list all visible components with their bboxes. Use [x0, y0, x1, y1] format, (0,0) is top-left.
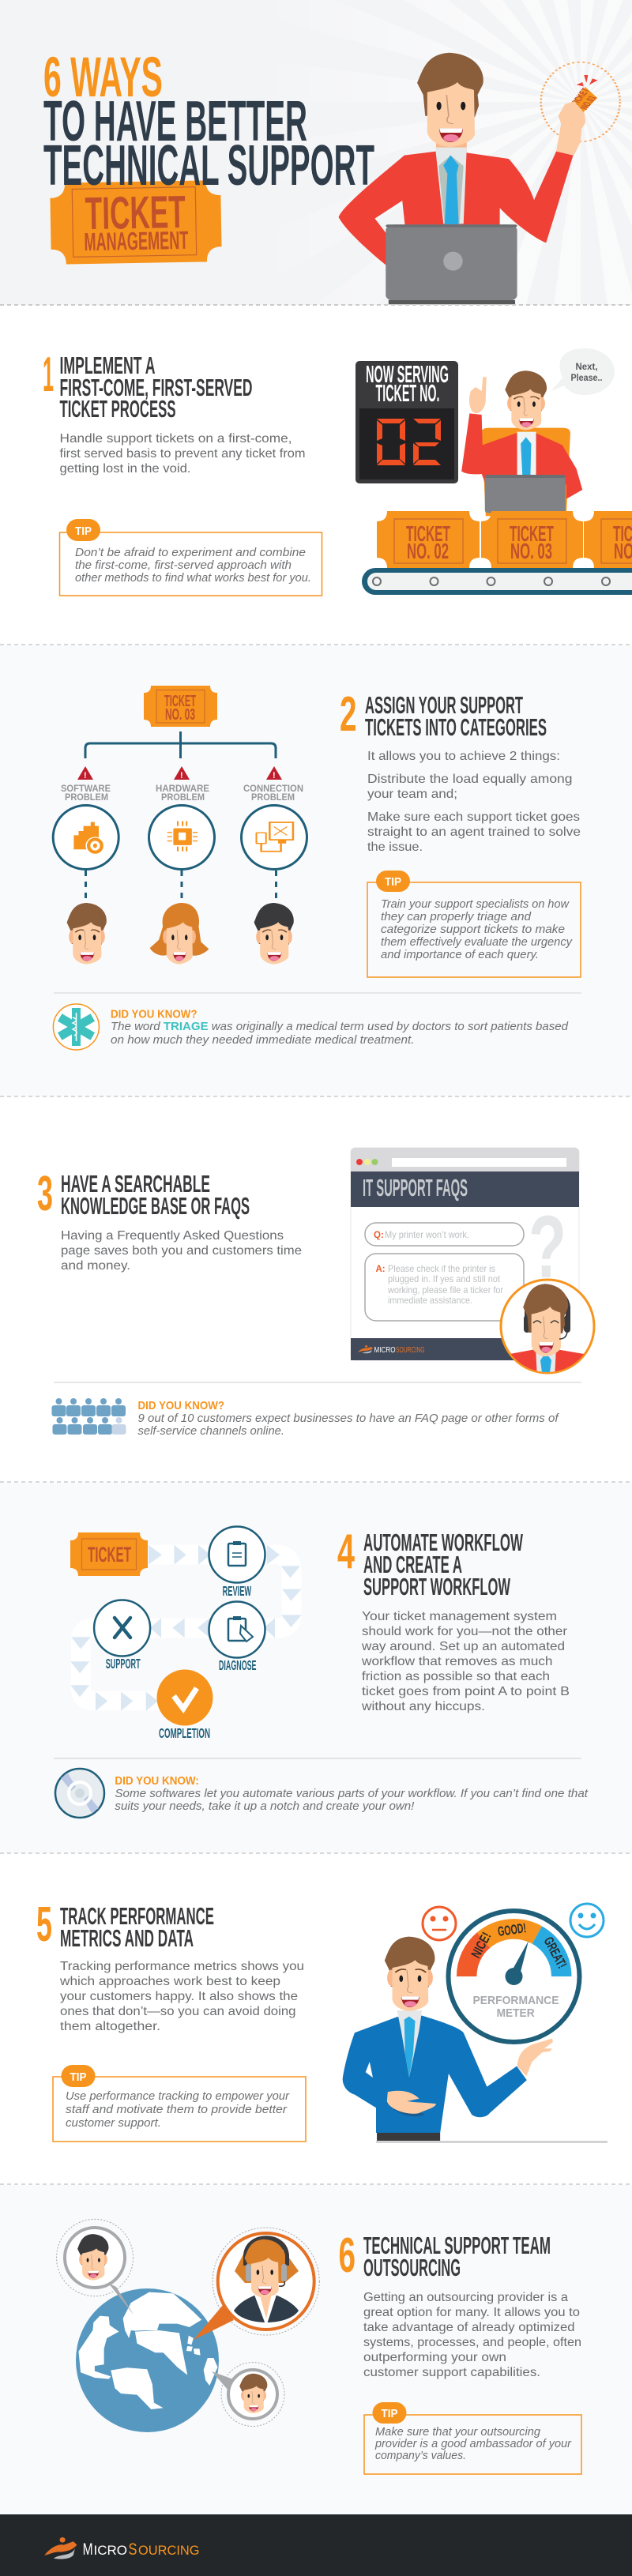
conveyor of tickets: NO. 02	[407, 539, 449, 563]
section 5 heading: TRACK PERFORMANCE	[60, 1903, 214, 1930]
section 4 heading: 4	[337, 1525, 355, 1579]
tip box 2	[367, 871, 581, 977]
section 1 heading: IMPLEMENT A	[60, 352, 155, 379]
browser window: IT support FAQs: IT SUPPORT FAQS	[363, 1175, 468, 1202]
tip box 2: them effectively evaluate the urgency	[381, 936, 573, 949]
tip box 1: Don’t be afraid to experiment and combine	[75, 547, 306, 559]
step: ticket	[70, 1532, 148, 1576]
speech bubble: Please..	[570, 372, 602, 383]
conveyor of tickets: NO. 03	[510, 539, 552, 563]
section 2 heading	[340, 687, 547, 742]
tip box 1: other methods to find what works best for you.	[75, 572, 311, 585]
illustration: man with laptop holding ticket	[339, 53, 620, 304]
did you know: triage: The word TRIAGE was originally a medical term used by doctors to sort patients based	[111, 1021, 569, 1033]
tip box 5	[53, 2065, 306, 2142]
section 3 heading	[37, 1167, 250, 1221]
section 6 heading: OUTSOURCING	[363, 2254, 461, 2281]
category: software problem: !	[84, 771, 87, 780]
icon: happy face	[570, 1904, 604, 1937]
section 3 heading: KNOWLEDGE BASE OR FAQS	[61, 1193, 250, 1220]
browser window: IT support FAQs: immediate assistance.	[388, 1295, 472, 1306]
footer: M	[83, 2540, 93, 2559]
section 1 heading: TICKET PROCESS	[60, 396, 175, 423]
section 6 heading	[338, 2228, 551, 2283]
conveyor of tickets: TICKET	[510, 521, 554, 546]
tip box 1	[60, 519, 322, 596]
ticket no. 03 tree: NO. 03	[165, 706, 195, 724]
section 5 body text: ones that don’t—so you can avoid doing	[60, 2005, 295, 2018]
section 1 body text: first served basis to prevent any ticket from	[60, 447, 306, 461]
illustration: man with laptop holding ticket: TICKET	[569, 87, 592, 107]
footer	[0, 2514, 632, 2576]
section 5 body text	[59, 1960, 304, 2033]
section 5 body text: your customers happy. It also shows the	[60, 1990, 298, 2003]
step: ticket: TICKET	[88, 1543, 131, 1566]
man in blue suit	[343, 1937, 608, 2143]
section 6 body text: outperforming your own	[363, 2351, 506, 2364]
tip box 2: and importance of each query.	[381, 949, 539, 961]
section 5 body text: which approaches work best to keep	[59, 1975, 280, 1988]
digits: 02	[377, 419, 441, 465]
section 2 body text: Distribute the load equally among	[367, 773, 572, 786]
section 4 body text: workflow that removes as much	[361, 1655, 553, 1668]
browser window: IT support FAQs: Q:	[374, 1231, 384, 1240]
section 6 body text: great option for many. It allows you to	[363, 2306, 580, 2319]
tip box 6: provider is a good ambassador of your	[374, 2438, 572, 2450]
did you know: faq: self-service channels online.	[137, 1425, 284, 1438]
tip box 6: TIP	[381, 2407, 398, 2420]
footer: OURCING	[138, 2543, 199, 2558]
section 1 body text: Handle support tickets on a first-come,	[60, 432, 292, 446]
step: review	[209, 1526, 265, 1599]
section 4 body text: friction as possible so that each	[362, 1670, 550, 1683]
section 3 heading: HAVE A SEARCHABLE	[61, 1171, 210, 1198]
performance meter: METER	[497, 2006, 535, 2020]
ticket no. 03 tree: TICKET	[164, 693, 196, 710]
section 4 body text: should work for you—not the other	[362, 1625, 568, 1638]
section 4 body text: way around. Set up an automated	[361, 1640, 565, 1653]
category: connection problem: PROBLEM	[251, 792, 295, 803]
did you know: faq: DID YOU KNOW?	[137, 1399, 224, 1412]
tip box 5: staff and motivate them to provide better	[66, 2104, 288, 2116]
browser window: IT support FAQs: My printer won’t work.	[385, 1229, 469, 1240]
performance meter: PERFORMANCE	[472, 1994, 559, 2007]
tip box 2: categorize support tickets to make	[381, 923, 565, 936]
browser window: IT support FAQs: working, please file a ticker for	[387, 1284, 503, 1296]
tip box 5: customer support.	[66, 2117, 161, 2130]
did you know: triage	[111, 1008, 569, 1047]
tip box 6: company’s values.	[375, 2450, 466, 2462]
did you know: faq	[137, 1399, 560, 1438]
category: connection problem: CONNECTION	[243, 783, 303, 794]
conveyor of tickets: TICKET	[406, 521, 450, 546]
workflow diagram	[70, 1526, 302, 1741]
section 5 heading: 5	[36, 1897, 52, 1952]
did you know: triage: DID YOU KNOW?	[111, 1008, 198, 1021]
tip box 5: TIP	[70, 2070, 87, 2084]
step: diagnose	[209, 1602, 265, 1673]
section 3 body text: and money.	[61, 1259, 130, 1273]
agent at desk	[461, 370, 582, 516]
conveyor of tickets	[362, 511, 632, 595]
title	[43, 47, 374, 197]
section 5 heading: METRICS AND DATA	[60, 1925, 194, 1952]
performance meter: GREAT!	[540, 1935, 570, 1971]
section 6 body text: customer support capabilities.	[363, 2366, 540, 2379]
section 4 body text: Your ticket management system	[362, 1610, 557, 1623]
tip box 1: TIP	[75, 525, 92, 538]
category: software problem: SOFTWARE	[61, 783, 111, 794]
tip box 2: TIP	[385, 875, 401, 889]
did you know: workflow	[115, 1774, 589, 1813]
title: TO HAVE BETTER	[43, 90, 307, 153]
section 6 body text	[363, 2291, 581, 2379]
now serving board: TICKET NO.	[376, 380, 439, 407]
performance meter	[449, 1911, 580, 2042]
step: review: REVIEW	[223, 1583, 251, 1599]
agent with headset	[501, 1280, 594, 1378]
performance meter: NICE!	[468, 1930, 494, 1961]
globe	[76, 2288, 219, 2432]
step: support: SUPPORT	[106, 1656, 141, 1672]
browser window: IT support FAQs: Please check if the printer is	[388, 1263, 495, 1274]
icon: sad face	[423, 1907, 456, 1940]
section 1 heading: 1	[43, 348, 54, 402]
section 2 body text: the issue.	[367, 840, 423, 854]
tip box 2: Train your support specialists on how	[381, 898, 570, 911]
tip box 6: Make sure that your outsourcing	[375, 2426, 540, 2439]
did you know: workflow: suits your needs, take it up a notch and create your own!	[115, 1800, 414, 1813]
step: diagnose: DIAGNOSE	[219, 1657, 256, 1673]
browser window: IT support FAQs: A:	[376, 1265, 386, 1274]
section 4 heading: SUPPORT WORKFLOW	[363, 1574, 510, 1600]
ticket badge: ticket management	[50, 180, 222, 265]
person bubble: philippines agent	[194, 2228, 319, 2340]
section 2 background	[0, 645, 632, 1096]
section 6 body text: systems, processes, and people, often	[363, 2336, 581, 2349]
browser window: IT support FAQs: plugged in. If yes and still not	[388, 1273, 501, 1284]
divider	[0, 304, 632, 306]
speech bubble	[551, 348, 615, 395]
browser window: IT support FAQs: MICRO	[374, 1346, 396, 1355]
category: software problem: PROBLEM	[65, 792, 108, 803]
title: 6 WAYS	[43, 47, 163, 109]
icon: star of life	[53, 1004, 99, 1050]
step: completion	[156, 1670, 213, 1741]
section 4 heading	[337, 1525, 523, 1600]
tip box 5: Use performance tracking to empower your	[66, 2090, 290, 2103]
section 3 body text: Having a Frequently Asked Questions	[61, 1229, 284, 1243]
section 1 heading: FIRST-COME, FIRST-SERVED	[60, 374, 253, 401]
section 4 background	[0, 1483, 632, 1853]
category: hardware problem	[149, 766, 215, 965]
header background with sun rays	[0, 0, 632, 305]
browser window: IT support FAQs	[351, 1148, 579, 1360]
person bubble: top left	[57, 2219, 134, 2315]
browser window: IT support FAQs: SOURCING	[396, 1346, 425, 1355]
tip box 1: the first-come, first-served approach with	[75, 559, 292, 572]
tip box 6	[364, 2402, 581, 2474]
tip box 2: they can properly triage and	[381, 911, 532, 923]
section 1 body text: getting lost in the void.	[60, 462, 191, 476]
ticket badge: ticket management: MANAGEMENT	[84, 226, 189, 256]
ticket no. 03 tree	[85, 686, 276, 758]
speech bubble: Next,	[575, 361, 597, 372]
did you know: workflow: DID YOU KNOW:	[115, 1774, 199, 1788]
browser window: IT support FAQs: ?	[529, 1198, 566, 1296]
section 4 body text	[361, 1610, 570, 1713]
section 6 body text: Getting an outsourcing provider is a	[363, 2291, 568, 2304]
illustration: man with laptop holding ticket: NO.01	[578, 95, 600, 111]
did you know: triage: on how much they needed immediate medical treatment.	[111, 1034, 414, 1047]
icon: disc	[55, 1769, 104, 1818]
section 2 body text: It allows you to achieve 2 things:	[367, 750, 560, 763]
now serving board	[356, 361, 458, 483]
section 6 heading: 6	[338, 2228, 356, 2283]
section 6 background	[0, 2185, 632, 2514]
section 1 body text	[60, 432, 306, 476]
section 5 heading	[36, 1897, 214, 1952]
footer: S	[128, 2540, 137, 2559]
section 4 body text: without any hiccups.	[361, 1700, 485, 1713]
section 5 body text: them altogether.	[60, 2020, 160, 2033]
section 3 body text: page saves both you and customers time	[61, 1244, 302, 1258]
did you know: workflow: Some softwares let you automate various parts of your workflow. If you can’t find one that	[115, 1788, 589, 1800]
section 2 heading: 2	[340, 687, 357, 742]
category: connection problem: !	[273, 771, 276, 780]
category: connection problem	[242, 766, 307, 965]
step: support	[94, 1600, 150, 1672]
category: hardware problem: !	[180, 771, 183, 780]
section 5 body text: Tracking performance metrics shows you	[60, 1960, 304, 1973]
section 4 body text: ticket goes from point A to point B	[362, 1685, 570, 1698]
section 1 heading	[43, 348, 253, 423]
section 2 body text: your team and;	[367, 788, 457, 801]
section 2 body text	[367, 750, 581, 854]
category: hardware problem: HARDWARE	[156, 783, 209, 794]
section 4 heading: AND CREATE A	[363, 1551, 462, 1578]
category: software problem	[53, 766, 118, 965]
icon: customers pictogram	[52, 1398, 126, 1435]
ticket badge: ticket management: TICKET	[85, 186, 186, 239]
category: hardware problem: PROBLEM	[161, 792, 205, 803]
now serving board: NOW SERVING	[366, 361, 449, 388]
section 3 heading: 3	[37, 1167, 53, 1221]
person bubble: bottom	[212, 2362, 284, 2427]
did you know: faq: 9 out of 10 customers expect businesses to have an FAQ page or other forms of	[137, 1412, 560, 1425]
section 3 body text	[61, 1229, 302, 1273]
section 6 body text: take advantage of already optimized	[363, 2321, 575, 2334]
section 2 body text: straight to an agent trained to solve	[367, 825, 581, 839]
section 2 body text: Make sure each support ticket goes	[367, 810, 580, 824]
performance meter: GOOD!	[497, 1920, 527, 1939]
footer: ICRO	[93, 2543, 127, 2558]
step: completion: COMPLETION	[159, 1725, 210, 1741]
